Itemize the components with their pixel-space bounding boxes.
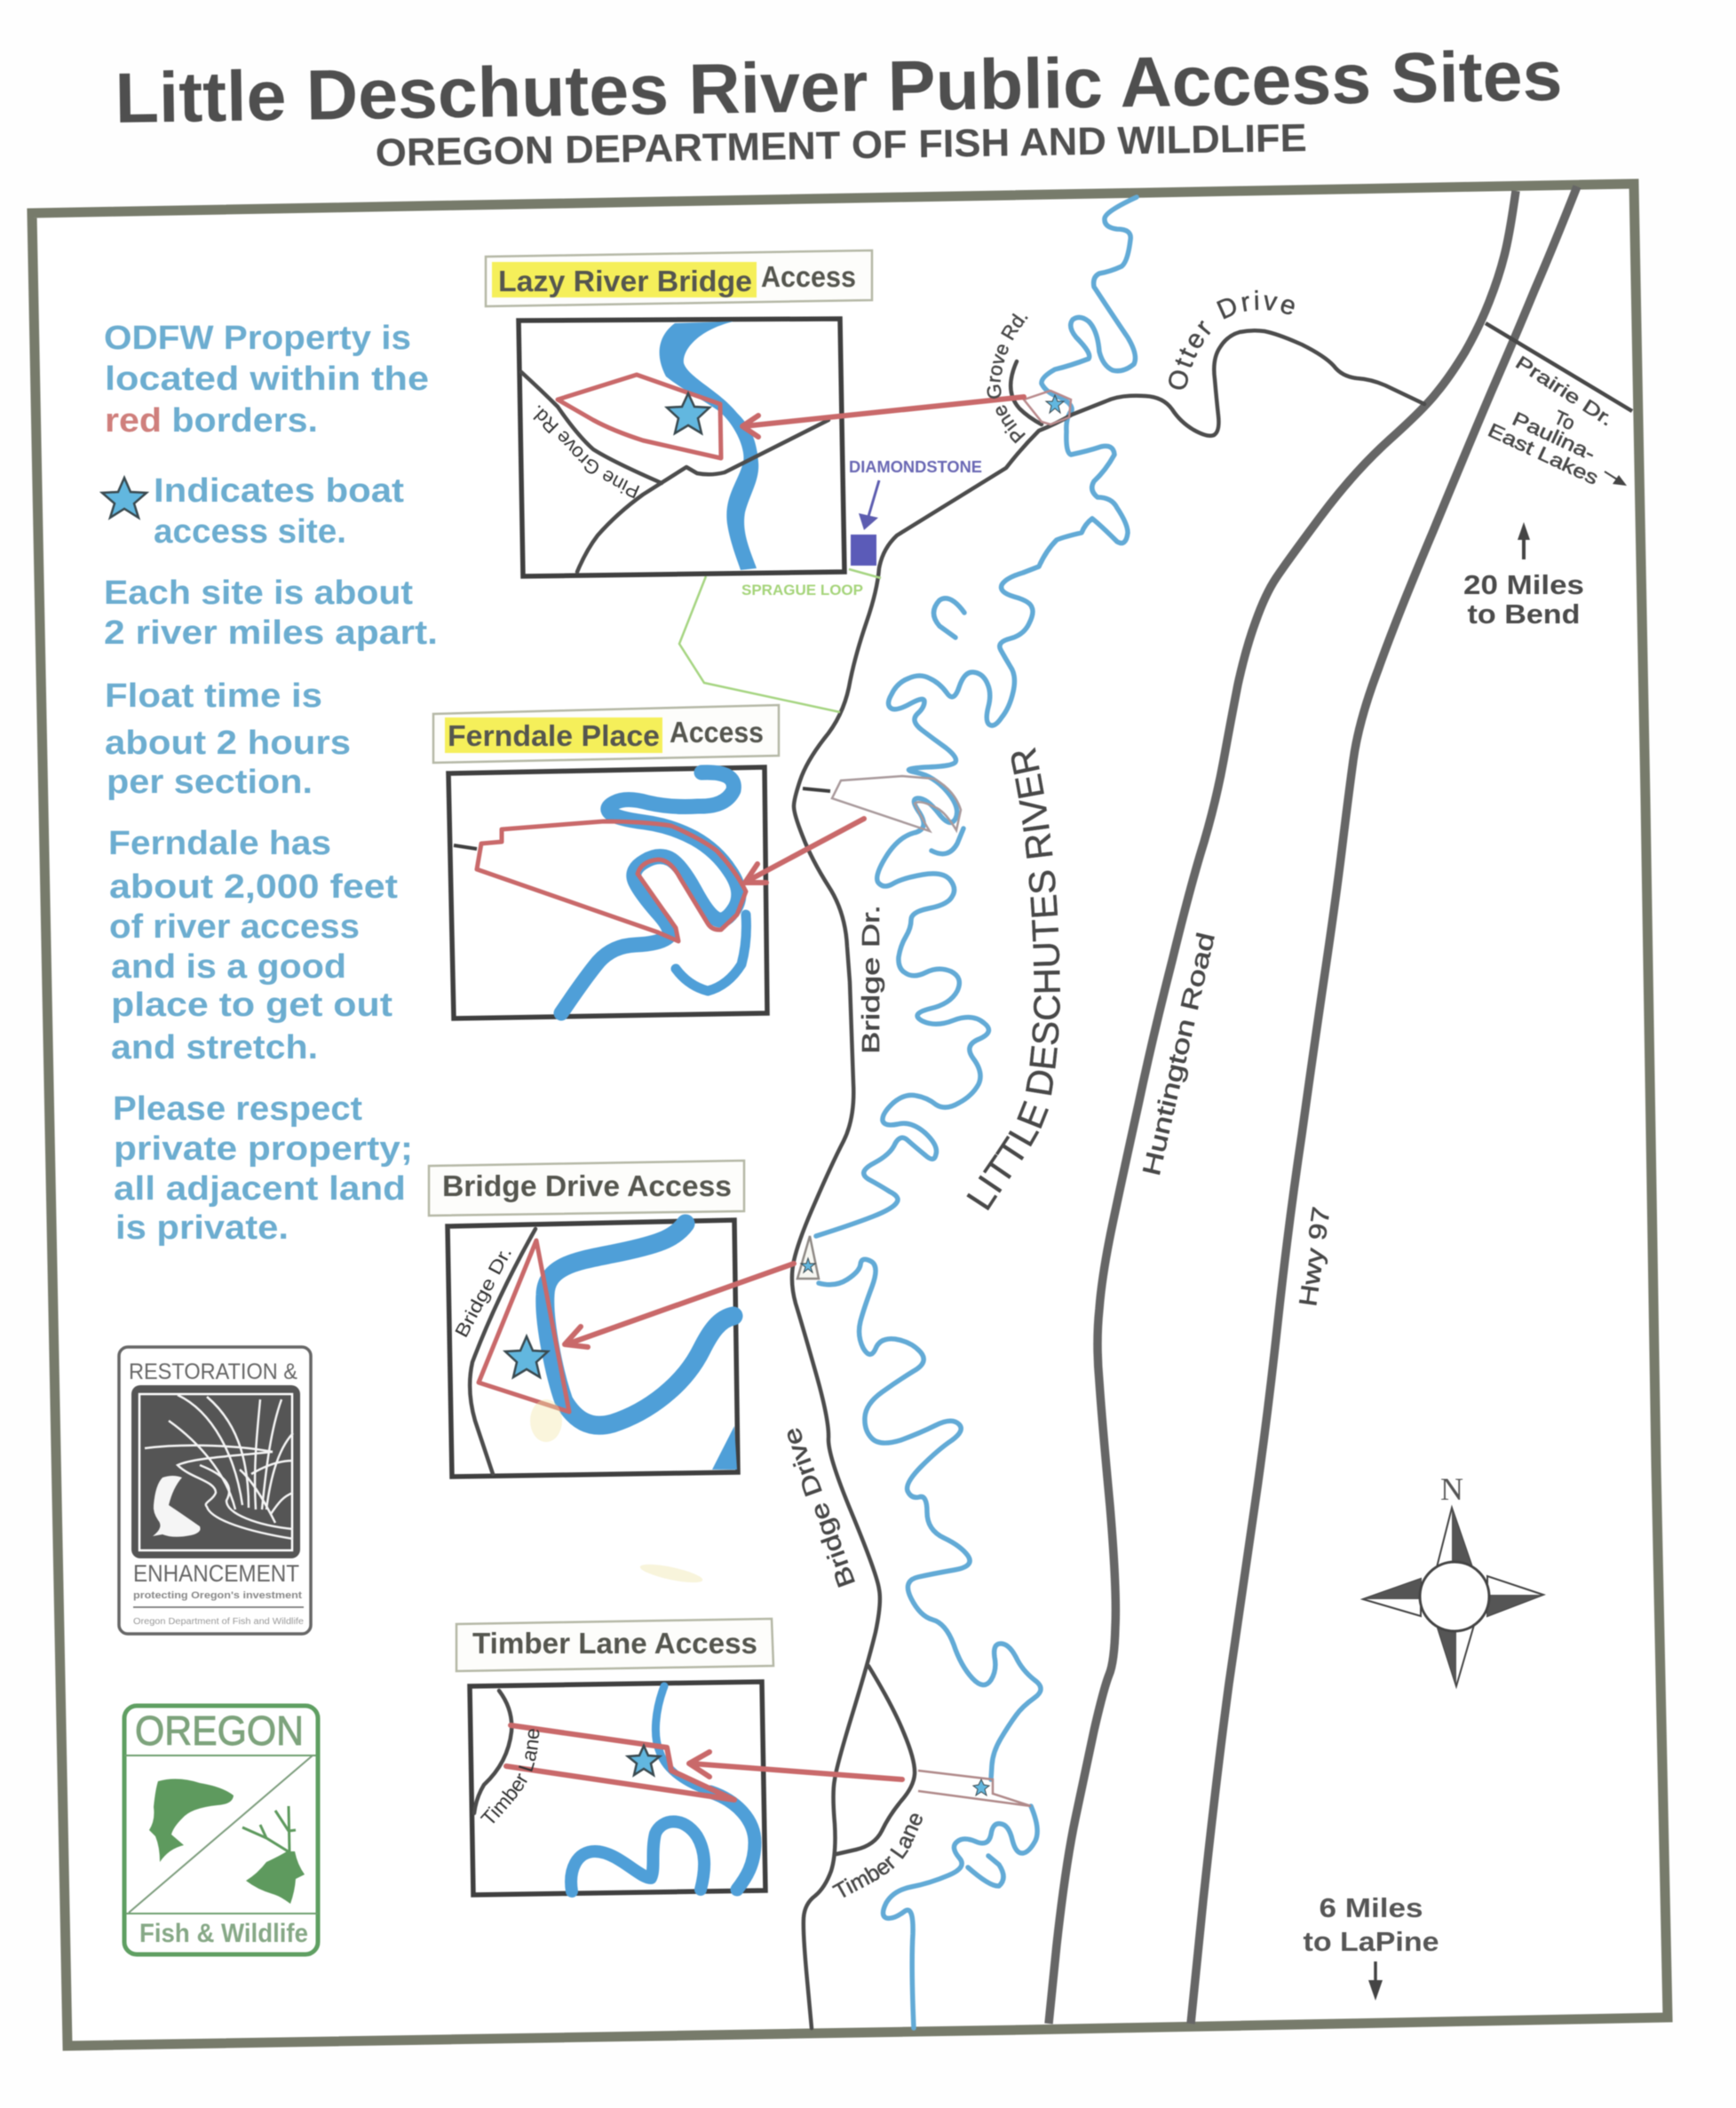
info text: ODFW property: ODFW Property is [104, 320, 411, 357]
label: to Paulina-East Lakes: East Lakes [1485, 419, 1602, 489]
heading: Lazy River Bridge Access [486, 250, 872, 306]
heading: Lazy River Bridge Access: Access [761, 260, 856, 293]
Timber Lane road [836, 1666, 915, 1854]
compass rose [1363, 1471, 1543, 1686]
arrow: Ferndale site to inset [745, 819, 864, 883]
road labels: Huntington Road [1138, 930, 1220, 1178]
info text: Ferndale [108, 825, 398, 1066]
Prairie Drive line [1486, 323, 1632, 411]
road labels: Hwy 97 [1294, 1205, 1336, 1308]
heading: Bridge Drive Access: Bridge Drive Access [442, 1169, 732, 1202]
info text: float time: about 2 hours [105, 725, 351, 762]
Sprague Loop label: SPRAGUE LOOP [741, 582, 863, 598]
panel: Timber Lane inset [455, 1617, 775, 1898]
subtitle: OREGON DEPARTMENT OF FISH AND WILDLIFE [375, 116, 1307, 175]
info text: ODFW property: red borders. [105, 402, 318, 440]
logo: Oregon Fish & Wildlife: Fish & Wildlife [139, 1919, 308, 1948]
road labels: Bridge Dr. [857, 905, 884, 1054]
info text: Ferndale: and is a good [111, 948, 346, 986]
label: to Paulina-East Lakes: Paulina- [1509, 408, 1599, 465]
stains [530, 1399, 704, 1586]
info text: Ferndale: Ferndale has [108, 825, 331, 862]
road labels: Prairie Dr. [1511, 353, 1617, 431]
road labels: Otter Drive [1168, 289, 1295, 391]
Diamondstone label and marker: DIAMONDSTONE [849, 458, 982, 476]
info text: Ferndale: place to get out [111, 987, 392, 1024]
panel: Ferndale Place inset [433, 705, 779, 1018]
info text: private property: Please respect [113, 1090, 362, 1128]
info text: float time: per section. [107, 764, 313, 801]
heading: Timber Lane Access [456, 1619, 773, 1671]
heading: Bridge Drive Access [429, 1161, 744, 1216]
arrow: Timber Lane site to inset [689, 1752, 902, 1779]
info text: Ferndale: and stretch. [111, 1029, 318, 1066]
info text: site spacing: 2 river miles apart. [104, 614, 438, 652]
main river [816, 197, 1137, 2028]
label: to Paulina-East Lakes [1485, 406, 1627, 489]
info text: private property [113, 1090, 413, 1247]
arrow: Bridge Drive site to inset [565, 1264, 794, 1347]
logo: Oregon Fish & Wildlife [124, 1706, 318, 1954]
info text: boat access [154, 472, 404, 551]
heading: Ferndale Place Access [433, 705, 779, 763]
info text: boat access: Indicates boat [154, 472, 404, 510]
label: 6 Miles to LaPine: 6 Miles [1320, 1892, 1423, 1923]
logo: Restoration & Enhancement: Oregon Department of Fish and Wildlife [133, 1617, 304, 1627]
panel: Lazy River Bridge inset [484, 249, 874, 579]
road labels: Bridge Drive [777, 1424, 860, 1591]
label: 20 Miles to Bend [1463, 522, 1584, 630]
info text: boat access: access site. [154, 513, 346, 551]
Bridge Drive and Otter Drive roads [792, 330, 1424, 2028]
logo: Restoration & Enhancement: RESTORATION & [129, 1359, 297, 1384]
info text: site spacing: Each site is about [104, 575, 413, 612]
panel: Bridge Drive inset [429, 1161, 744, 1477]
label: to Paulina-East Lakes: To [1550, 406, 1579, 434]
label: 6 Miles to LaPine: to LaPine [1304, 1926, 1439, 1957]
info text: ODFW property [104, 320, 429, 440]
logo: Restoration & Enhancement [119, 1347, 311, 1634]
logo: Restoration & Enhancement: ENHANCEMENT [133, 1560, 299, 1587]
logo: Restoration & Enhancement: protecting Oregon's investment [133, 1590, 302, 1601]
Huntington Road line [1049, 191, 1516, 2024]
arrow: Lazy River site to inset [742, 397, 1024, 437]
info text: site spacing [104, 575, 438, 652]
title: Little Deschutes River Public Access Sites [115, 36, 1563, 138]
label: 6 Miles to LaPine [1304, 1892, 1439, 2001]
Highway 97 line [1191, 186, 1577, 2024]
label: 20 Miles to Bend: 20 Miles [1463, 569, 1584, 600]
info text: private property: private property; [114, 1130, 413, 1168]
river name: LITTLE DESCHUTES RIVER [966, 747, 1061, 1211]
Pine Grove road [1011, 361, 1042, 424]
road labels [746, 289, 1617, 1922]
info text: float time [105, 678, 351, 801]
heading: Lazy River Bridge Access: Lazy River Bridge [498, 265, 752, 297]
info text: float time: Float time is [105, 678, 322, 715]
info text: Ferndale: about 2,000 feet [109, 868, 398, 906]
logo: Oregon Fish & Wildlife: OREGON [135, 1708, 304, 1754]
site markers on main map [797, 391, 1071, 1806]
road labels: Timber Lane [831, 1813, 923, 1898]
road labels: Pine Grove Rd. [986, 313, 1028, 444]
label: 20 Miles to Bend: to Bend [1467, 598, 1581, 630]
heading: Ferndale Place Access: Access [670, 716, 764, 749]
compass rose: N [1440, 1471, 1463, 1507]
icon: boat access star legend [102, 478, 147, 518]
Sprague Loop lines [679, 569, 881, 712]
panel: Timber Lane inset: Timber Lane [480, 1728, 540, 1824]
info text: ODFW property: located within the [105, 361, 429, 398]
info text: private property: all adjacent land [114, 1170, 406, 1208]
panel: Bridge Drive inset: Bridge Dr. [451, 1244, 516, 1341]
panel: Lazy River Bridge inset: Pine Grove Rd. [533, 405, 640, 499]
info text: Ferndale: of river access [109, 908, 360, 946]
heading: Timber Lane Access: Timber Lane Access [472, 1627, 757, 1660]
info text: private property: is private. [115, 1209, 289, 1247]
heading: Ferndale Place Access: Ferndale Place [448, 719, 660, 752]
Diamondstone label and marker [849, 458, 982, 566]
